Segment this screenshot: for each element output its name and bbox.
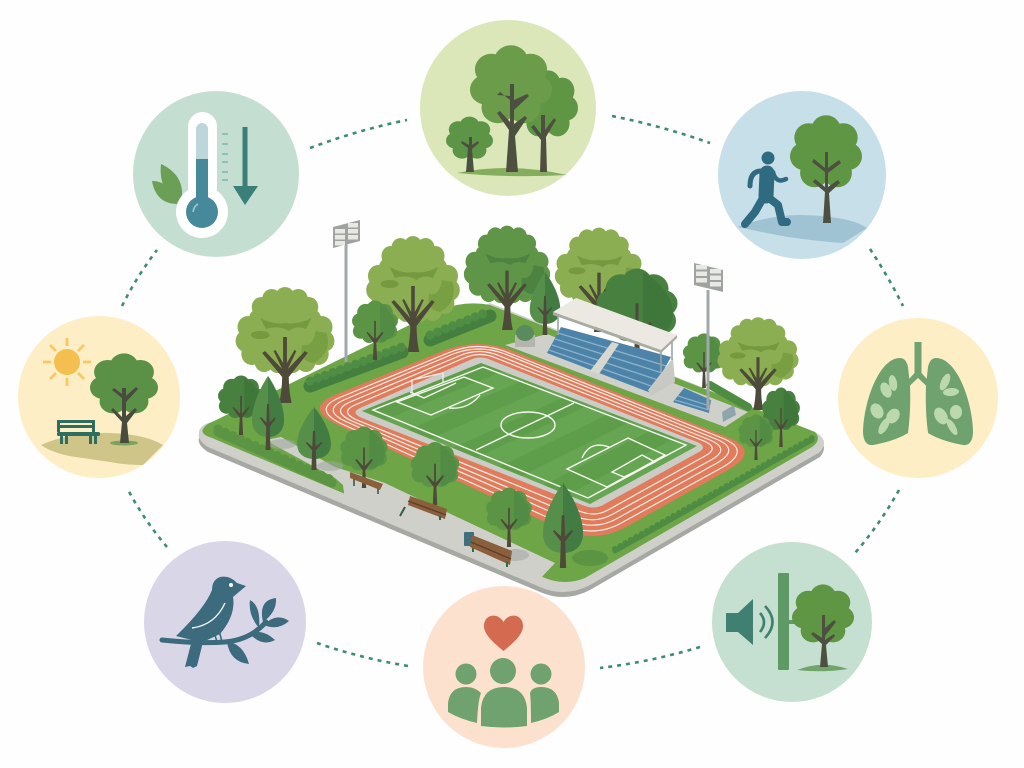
central sports park scene <box>199 220 824 597</box>
wing highlight <box>192 603 225 628</box>
tree <box>252 376 284 450</box>
leaves <box>152 164 182 204</box>
side and front trees <box>218 300 800 568</box>
small bush <box>572 550 608 566</box>
seating <box>547 327 671 393</box>
sound waves <box>760 606 772 638</box>
grass stripes <box>362 363 675 495</box>
bench 3 <box>470 535 512 567</box>
paved shadows <box>268 439 529 561</box>
ground <box>737 215 867 243</box>
tree <box>792 584 854 671</box>
sun <box>43 338 91 386</box>
tree <box>738 414 774 460</box>
tree <box>790 115 862 223</box>
tree <box>486 488 532 547</box>
platform base <box>199 303 824 597</box>
posts <box>558 313 672 372</box>
speaker <box>726 599 753 645</box>
small tree <box>446 117 493 172</box>
barrier wall <box>778 573 795 670</box>
people <box>448 658 559 728</box>
tree <box>683 333 725 388</box>
heart <box>484 616 523 651</box>
bench 1 <box>350 472 383 494</box>
icon: cooling thermometer <box>133 91 299 257</box>
tree <box>218 376 264 435</box>
icon: bird habitat <box>144 541 306 703</box>
tree <box>717 317 799 410</box>
tree <box>596 268 678 370</box>
floodlight left <box>333 220 360 362</box>
back trees <box>236 226 725 403</box>
icon: community wellbeing <box>423 586 585 748</box>
dotted connector ring <box>122 116 903 668</box>
right lung <box>926 358 973 445</box>
ground <box>41 433 163 465</box>
side wall <box>648 358 675 396</box>
thermometer <box>176 112 228 238</box>
icon: trees benefit <box>420 20 596 196</box>
tree <box>555 228 643 332</box>
walkway <box>265 437 555 581</box>
leaves <box>868 372 962 437</box>
tree <box>464 226 550 330</box>
tree <box>340 426 388 488</box>
tree <box>530 272 560 335</box>
walker <box>745 152 787 224</box>
trachea <box>906 342 930 386</box>
scale ticks <box>222 134 228 180</box>
trash bin <box>464 532 474 546</box>
running track <box>320 344 745 536</box>
eye <box>229 583 233 587</box>
tree <box>297 407 331 470</box>
floodlight right <box>694 263 723 410</box>
grandstand <box>547 298 677 396</box>
tree <box>236 287 334 403</box>
tree <box>90 353 158 446</box>
ground <box>457 168 567 176</box>
bird and branch <box>162 577 289 668</box>
right tree <box>518 70 578 172</box>
left lung <box>863 358 910 445</box>
icon: shade park <box>18 316 180 478</box>
leaves <box>250 600 259 628</box>
planter <box>515 325 535 347</box>
pitch markings <box>373 367 686 498</box>
stand pad <box>505 334 748 427</box>
big tree <box>470 45 552 172</box>
goal frame <box>412 373 443 393</box>
bench 2 <box>400 496 447 520</box>
tree <box>366 236 460 352</box>
icon: noise barrier <box>712 542 872 702</box>
soccer field <box>355 358 703 508</box>
hedges <box>218 311 812 551</box>
tree <box>543 483 583 568</box>
tree <box>352 300 398 360</box>
down arrow <box>233 127 258 205</box>
stairs <box>590 342 619 374</box>
icon: clean air lungs <box>838 318 998 478</box>
roof <box>553 298 677 350</box>
icon: walking near tree <box>718 91 886 259</box>
tree <box>411 442 459 505</box>
tree <box>762 388 800 447</box>
bench <box>57 420 100 444</box>
small bleacher <box>673 388 736 422</box>
